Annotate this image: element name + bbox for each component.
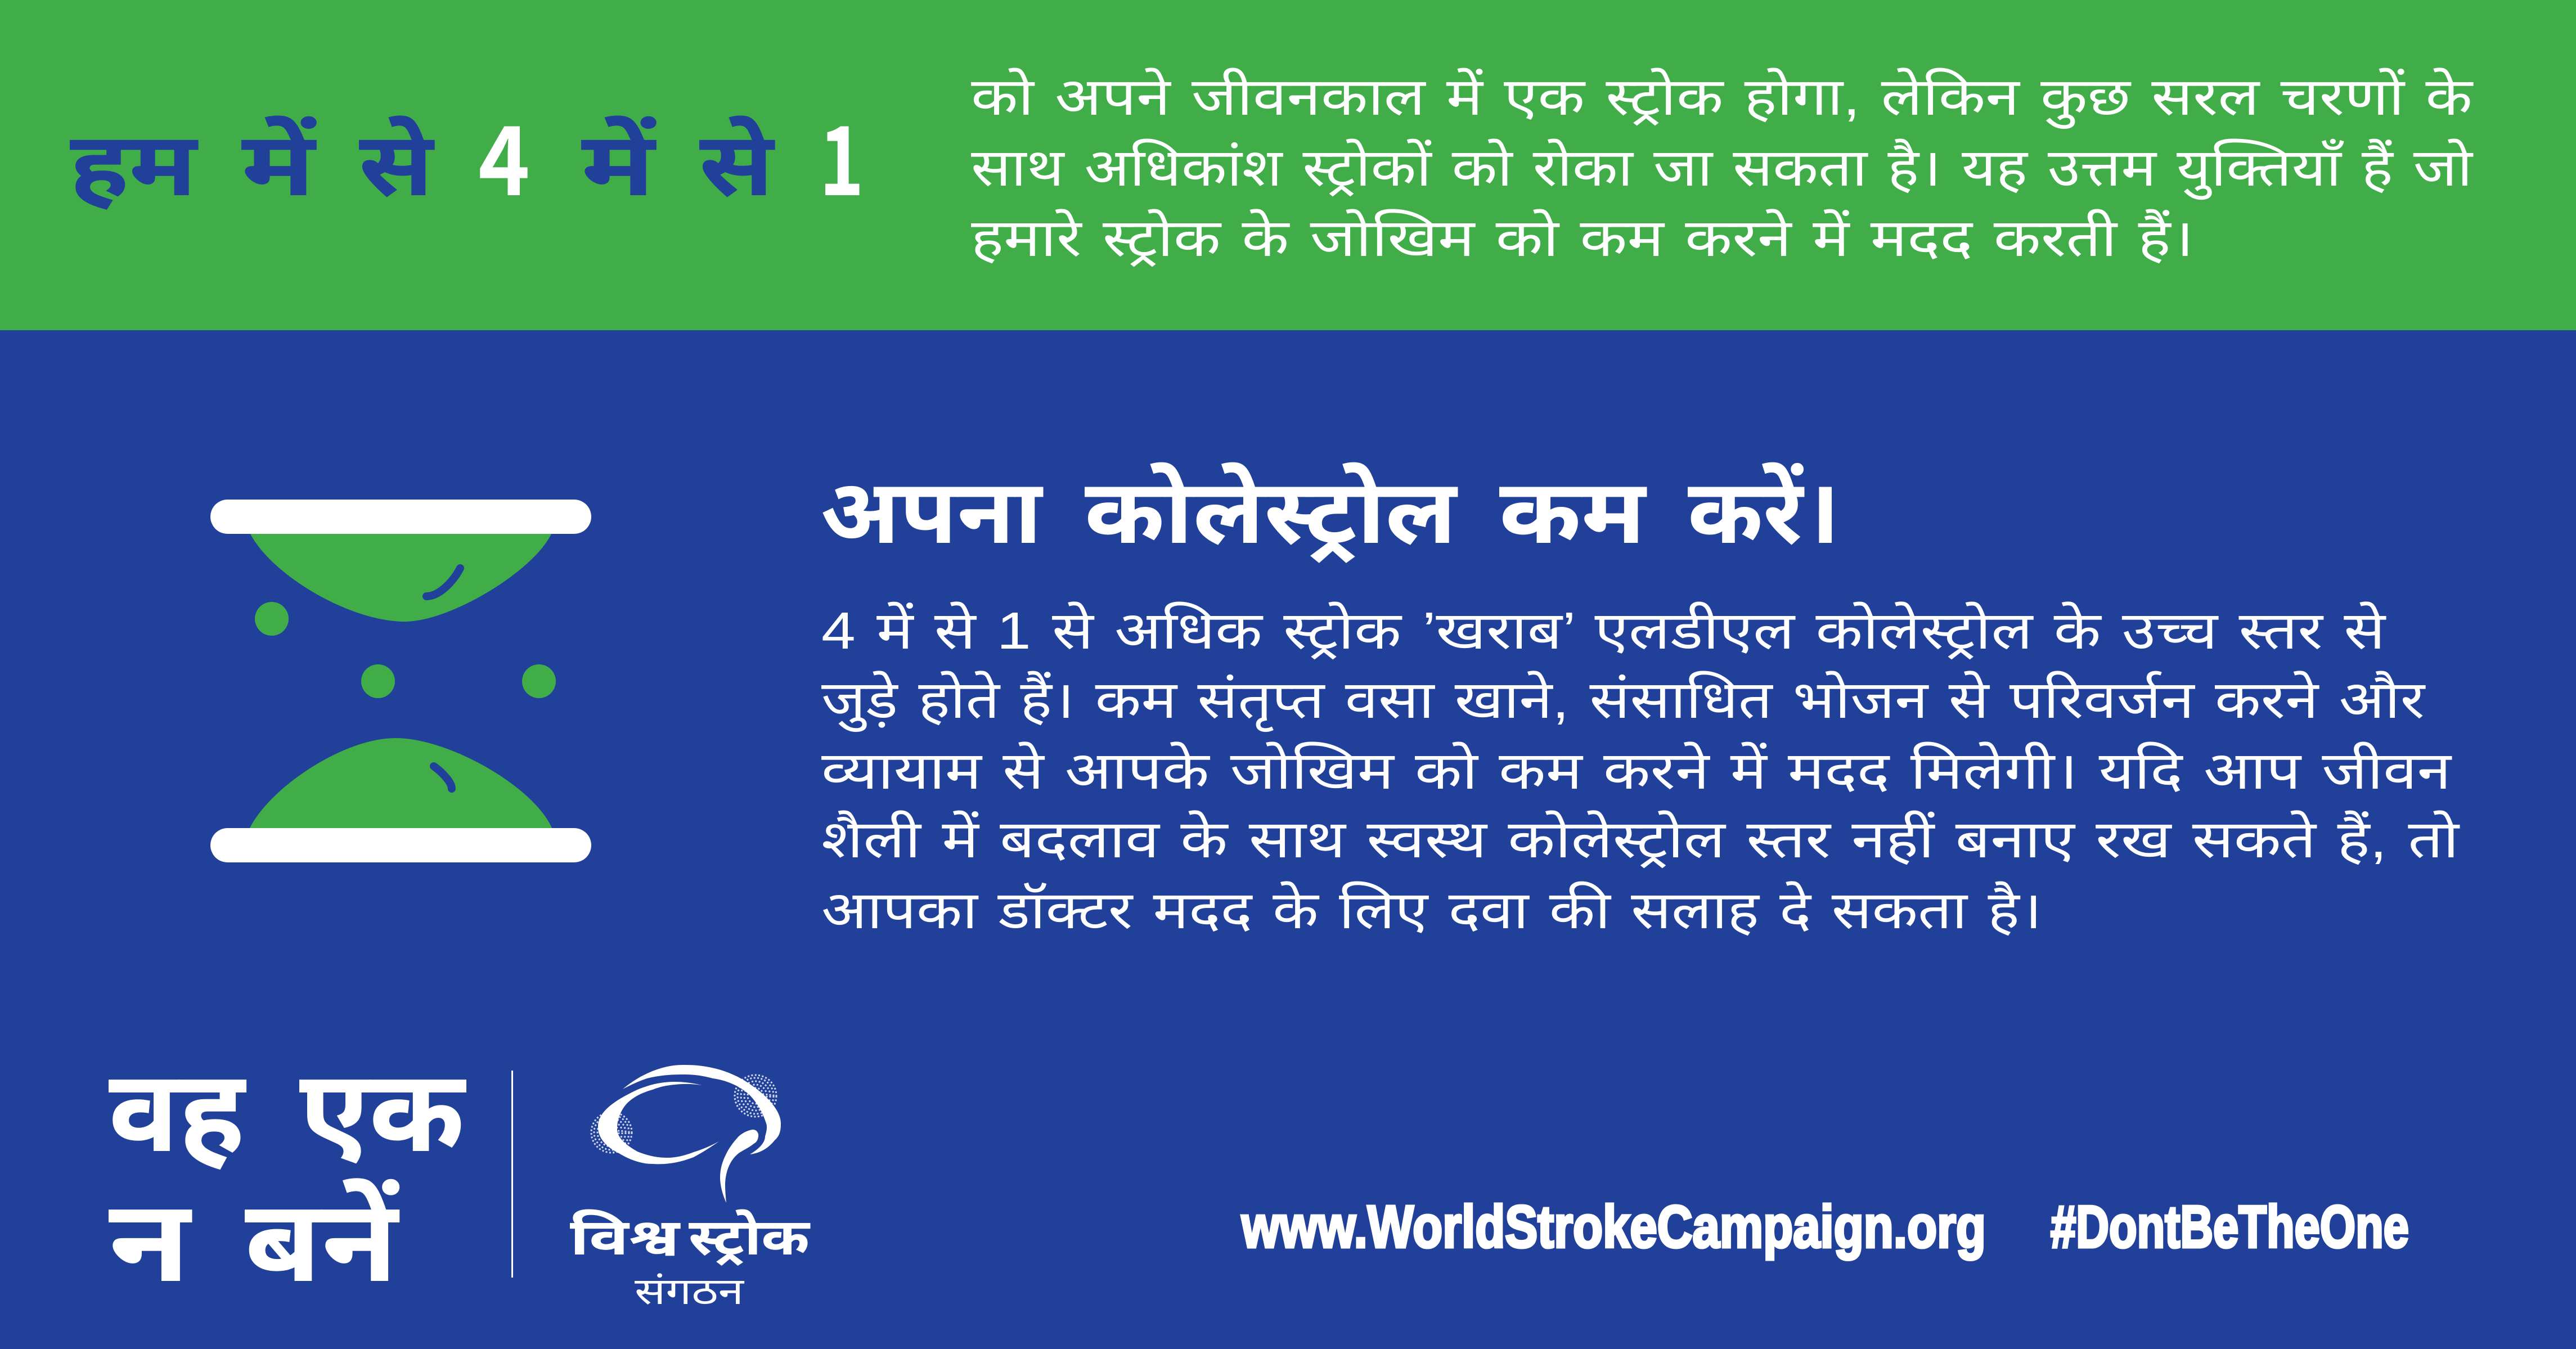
divider <box>511 1071 513 1278</box>
panel: top banner <box>0 0 2576 330</box>
main heading: करें। <box>1688 461 1840 562</box>
campaign slogan: एक <box>299 1047 467 1176</box>
body text: जुड़े होते हैं। कम संतृप्त वसा खाने, संसाधित भोजन से परिवर्जन करने और <box>821 671 2426 732</box>
logo: World Stroke Organization <box>570 1065 811 1312</box>
logo wordmark: विश्व <box>570 1209 681 1266</box>
icon: hourglass with cholesterol <box>210 500 591 862</box>
logo wordmark <box>570 1209 811 1266</box>
banner text: हमारे स्ट्रोक के जोखिम को कम करने में मदद करती हैं। <box>971 209 2194 267</box>
body text <box>821 601 2460 939</box>
main heading: कम <box>1499 461 1647 562</box>
campaign slogan <box>109 1047 467 1306</box>
banner text: को अपने जीवनकाल में एक स्ट्रोक होगा, लेकिन कुछ सरल चरणों के <box>971 68 2474 129</box>
campaign slogan: बनें <box>245 1177 400 1306</box>
logo wordmark: स्ट्रोक <box>689 1209 811 1266</box>
body text: 4 में से 1 से अधिक स्ट्रोक ’खराब’ एलडीएल कोलेस्ट्रोल के उच्च स्तर से <box>821 601 2387 660</box>
website url: www.WorldStrokeCampaign.org <box>1241 1194 1986 1260</box>
hashtag: #DontBeTheOne <box>2051 1194 2409 1260</box>
body text: व्यायाम से आपके जोखिम को कम करने में मदद मिलेगी। यदि आप जीवन <box>821 741 2452 800</box>
banner heading: 4 <box>478 84 530 223</box>
banner heading: से <box>359 115 435 214</box>
banner heading: में <box>241 115 317 214</box>
banner heading: 1 <box>819 84 864 223</box>
banner heading <box>70 84 864 223</box>
main heading <box>820 461 1840 564</box>
body text: शैली में बदलाव के साथ स्वस्थ कोलेस्ट्रोल स्तर नहीं बनाए रख सकते हैं, तो <box>821 810 2460 869</box>
main heading: अपना <box>820 461 1044 562</box>
banner text <box>971 68 2474 267</box>
banner heading: हम <box>70 115 199 214</box>
banner text: साथ अधिकांश स्ट्रोकों को रोका जा सकता है। यह उत्तम युक्तियाँ हैं जो <box>971 138 2474 200</box>
banner heading: में <box>581 115 657 214</box>
campaign slogan: न <box>109 1177 192 1306</box>
banner heading: से <box>699 115 775 214</box>
main heading: कोलेस्ट्रोल <box>1085 461 1458 564</box>
campaign slogan: वह <box>109 1047 247 1176</box>
body text: आपका डॉक्टर मदद के लिए दवा की सलाह दे सकता है। <box>821 881 2042 939</box>
logo sub-wordmark: संगठन <box>635 1270 745 1312</box>
